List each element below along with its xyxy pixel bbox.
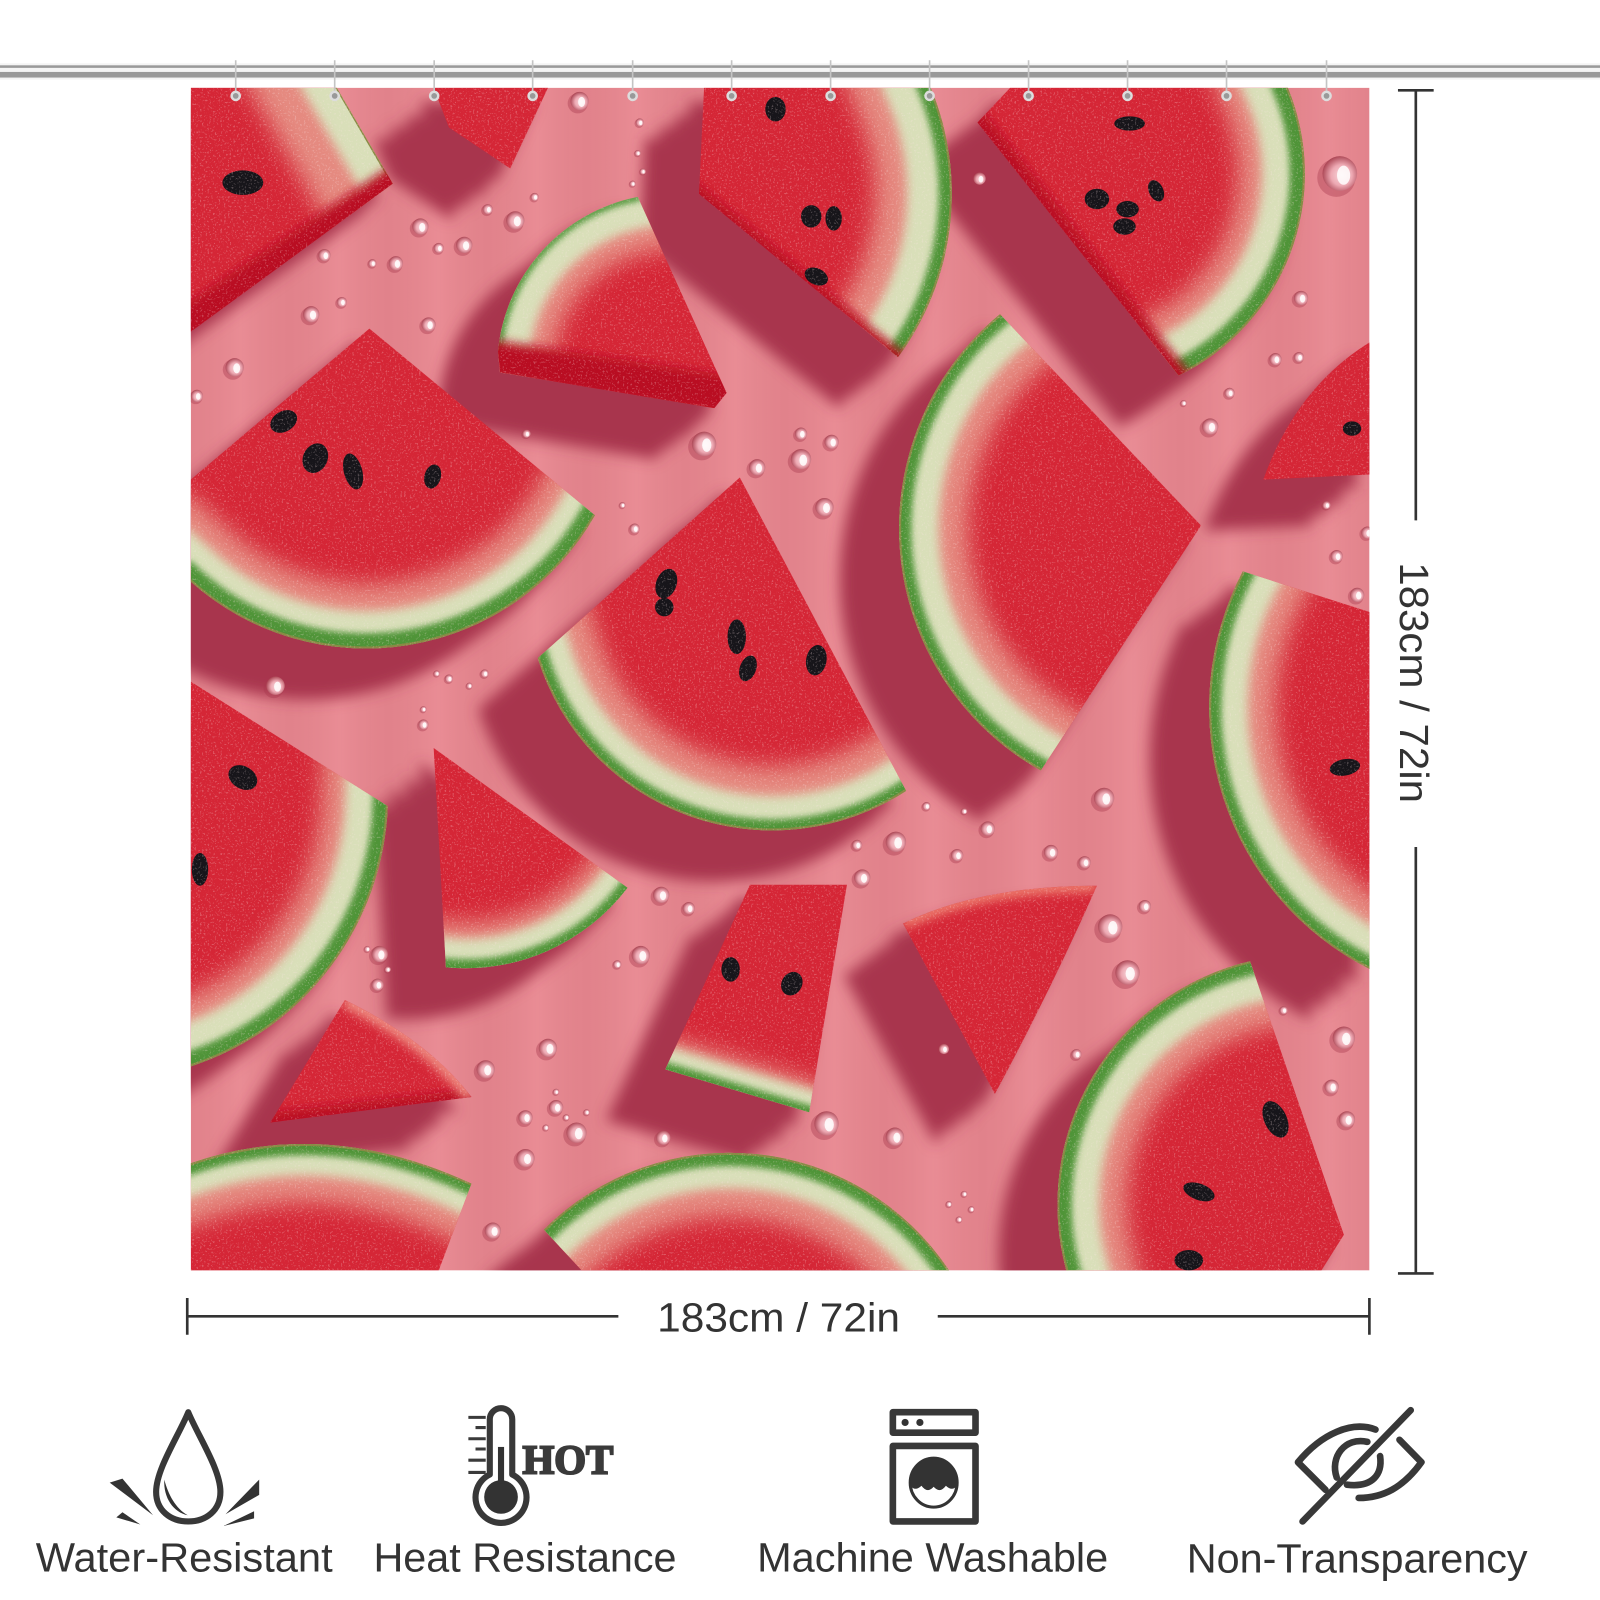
vertical dimension: height	[1391, 90, 1437, 1273]
slice: lower right triangle	[903, 886, 1097, 1094]
water droplets	[189, 92, 1373, 1242]
horizontal dimension: width: 183cm / 72in	[657, 1295, 900, 1341]
vertical dimension: height: 183cm / 72in	[1391, 562, 1437, 803]
slice: right edge large	[1209, 571, 1370, 969]
feature: non-transparency: Non-Transparency	[1187, 1535, 1528, 1581]
slice: large left	[191, 329, 595, 648]
horizontal dimension: width	[187, 1295, 1369, 1341]
slice: small top	[434, 88, 548, 168]
feature: heat resistance	[373, 1408, 677, 1580]
icon: thermometer with HOT: HOT	[522, 1437, 613, 1482]
curtain hooks	[232, 60, 1331, 100]
slice: top left	[190, 88, 393, 332]
slice: centre	[538, 478, 906, 830]
icon: washing machine	[893, 1412, 976, 1521]
slice: bottom left	[191, 1144, 471, 1270]
shower curtain panel: watermelon print	[190, 88, 1370, 1270]
feature: heat resistance: Heat Resistance	[373, 1534, 677, 1580]
slice: lower centre with seeds	[653, 885, 847, 1116]
slice: left lower	[191, 682, 388, 1066]
icon: thermometer with HOT	[468, 1408, 613, 1523]
icon: water drop	[110, 1412, 259, 1526]
slice: right edge small	[1263, 342, 1370, 480]
feature: machine washable	[757, 1412, 1108, 1580]
feature: water resistant	[36, 1412, 333, 1580]
feature: machine washable: Machine Washable	[757, 1534, 1108, 1580]
slice: top right	[974, 88, 1305, 380]
watermelon slices	[184, 51, 1370, 1270]
slice: top centre	[694, 88, 952, 362]
feature: water resistant: Water-Resistant	[36, 1534, 333, 1580]
flesh speckle texture	[191, 88, 1369, 1270]
cast shadows of slices	[132, 102, 1356, 1321]
slice: bottom centre	[544, 1153, 949, 1270]
icon: crossed-out eye	[1298, 1410, 1421, 1521]
slice: small wedge	[434, 748, 628, 968]
curtain rod	[0, 63, 1600, 80]
slice: upper centre-left with bottom cut	[490, 197, 735, 408]
slice: right centre	[899, 314, 1201, 770]
slice: lower left small	[267, 1000, 476, 1122]
slice: bottom right	[1057, 961, 1344, 1270]
feature: non-transparency	[1187, 1410, 1528, 1581]
